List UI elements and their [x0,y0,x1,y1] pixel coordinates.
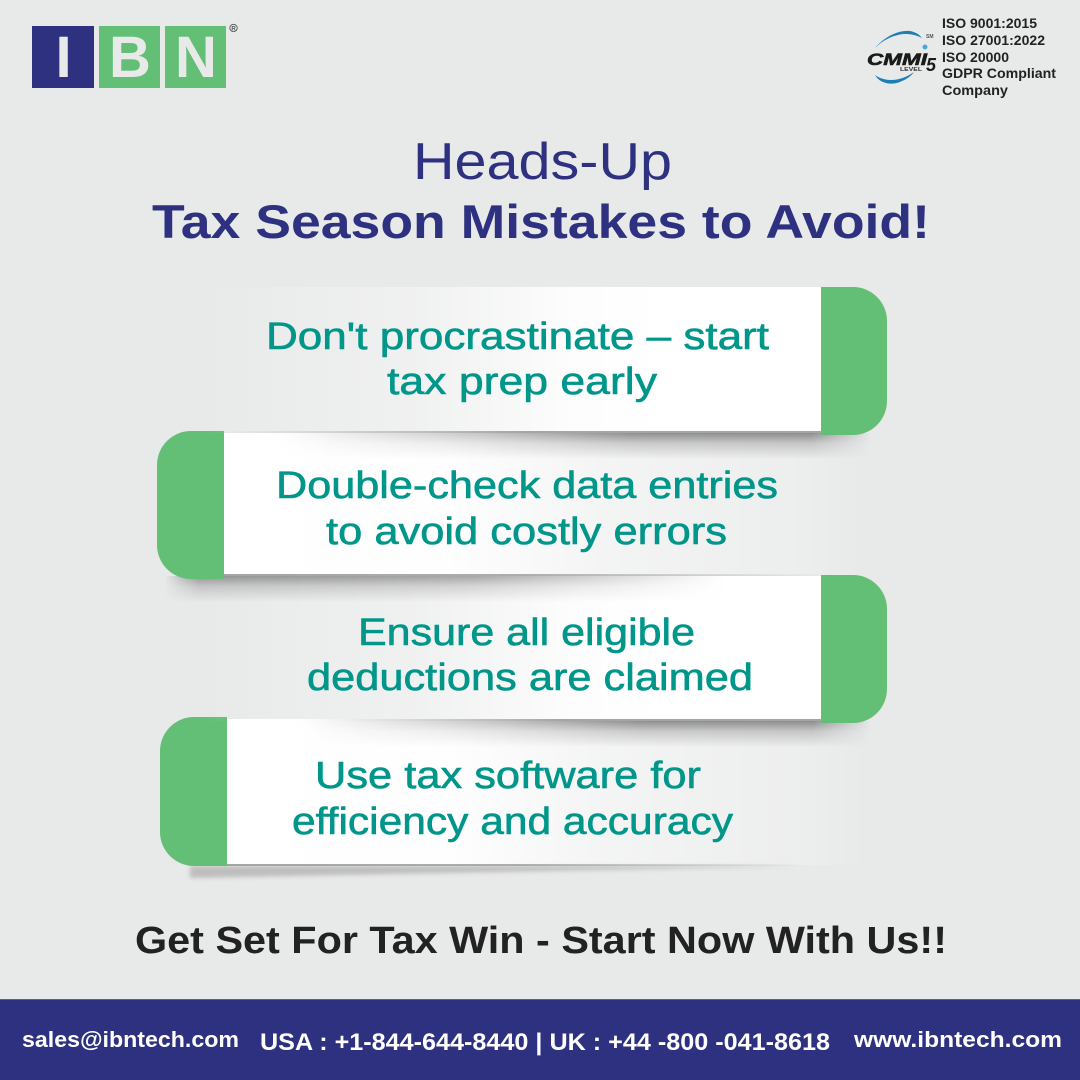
logo: IBN: R [231,26,236,32]
certification: CMMI level 5 badge: CMMI [867,50,929,69]
footer email: sales@ibntech.com [22,1027,239,1052]
card 1: Don't procrastinate – start [266,316,770,358]
card 3: Ensure all eligible [358,612,695,654]
card 1 [264,287,887,456]
footer bar [0,999,1080,1080]
card 4: efficiency and accuracy [292,801,733,843]
footer website: www.ibntech.com [853,1027,1062,1052]
certification: CMMI level 5 badge: SM [926,34,934,40]
logo: IBN: N [175,25,217,90]
card 4 [160,717,867,878]
logo: IBN [32,24,237,90]
footer phone numbers: USA : +1-844-644-8440 | UK : +44 -800 -041-8618 [260,1029,830,1056]
title: Tax Season Mistakes to Avoid! [152,195,930,248]
title: Heads-Up [413,133,672,191]
card 2: Double-check data entries [276,465,778,507]
certification list: Company [942,83,1009,98]
certification: CMMI level 5 badge: 5 [926,55,937,75]
certification list: ISO 20000 [942,50,1009,65]
card 1: tax prep early [387,361,657,403]
card 2 [157,431,784,598]
logo: IBN: B [109,25,151,90]
card 4: Use tax software for [315,755,701,797]
card 3: deductions are claimed [307,657,753,699]
certification list: ISO 27001:2022 [942,33,1045,48]
logo: IBN: I [55,25,72,90]
title [152,133,930,248]
certification list [942,16,1057,98]
call to action: Get Set For Tax Win - Start Now With Us!! [135,920,947,962]
certification: CMMI level 5 badge: LEVEL [900,67,922,73]
card 2: to avoid costly errors [326,511,727,553]
card 3 [308,575,887,744]
certification: CMMI level 5 badge [867,31,937,84]
certification list: ISO 9001:2015 [942,16,1037,31]
certification list: GDPR Compliant [942,66,1057,81]
